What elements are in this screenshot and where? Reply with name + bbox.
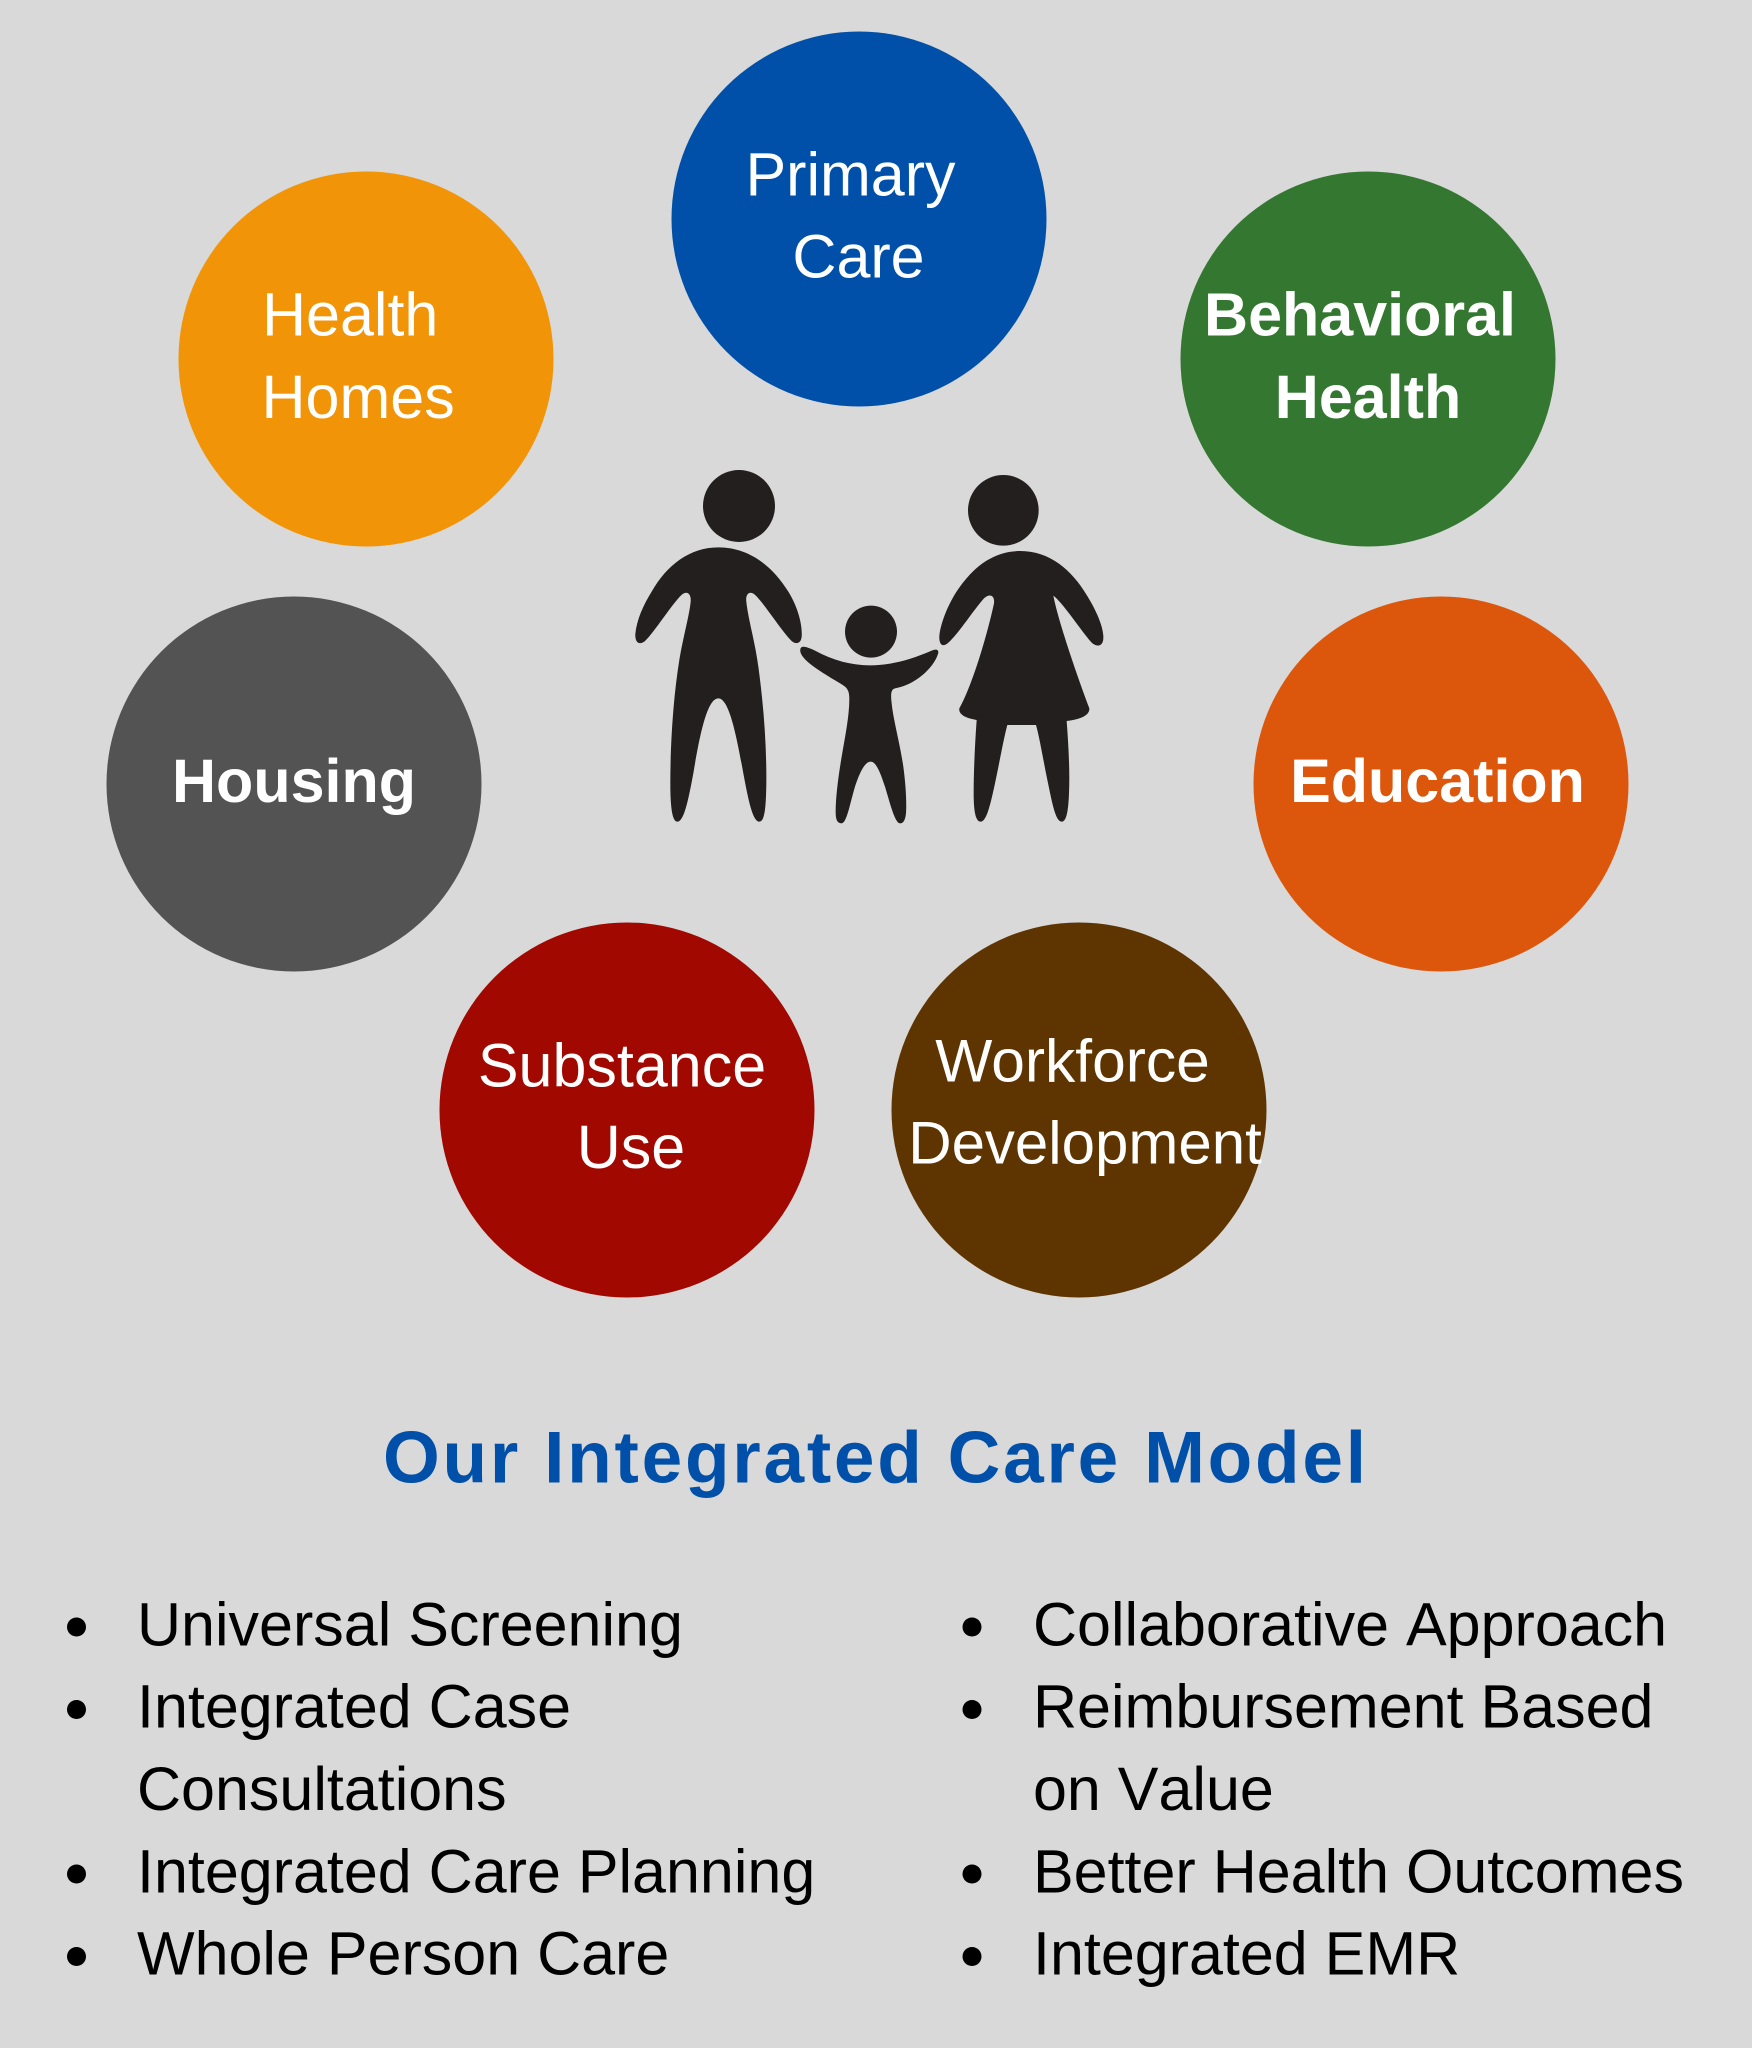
list item: reimbursement based on value: [962, 1672, 1653, 1823]
panel: housing circle: Housing: [172, 747, 416, 815]
list item: universal screening: Universal Screening: [137, 1590, 683, 1658]
panel: health homes circle: [178, 172, 554, 546]
panel: primary care circle: Care: [792, 222, 925, 290]
title: Our Integrated Care Model: [383, 1418, 1366, 1498]
list item: integrated case consultations: Integrated Case: [137, 1672, 571, 1740]
list item: whole person care: Whole Person Care: [137, 1920, 669, 1988]
icon: father: [635, 470, 802, 822]
list: right column: [962, 1590, 1684, 1988]
panel: primary care circle: Primary: [745, 140, 956, 208]
panel: primary care circle: [672, 32, 1046, 406]
panel: behavioral health circle: Health: [1275, 363, 1461, 431]
icon: mother: [939, 475, 1103, 822]
panel: substance use circle: Substance: [478, 1032, 766, 1100]
list item: integrated case consultations: [67, 1672, 571, 1823]
panel: education circle: Education: [1290, 747, 1585, 815]
list item: reimbursement based on value: Reimbursement Based: [1033, 1672, 1653, 1740]
list item: reimbursement based on value: on Value: [1033, 1755, 1274, 1823]
panel: substance use circle: Use: [577, 1113, 685, 1181]
panel: housing circle: [106, 596, 482, 972]
list item: collaborative approach: Collaborative Approach: [1033, 1590, 1667, 1658]
list item: integrated case consultations: Consultations: [137, 1755, 507, 1823]
icon: child: [800, 606, 938, 823]
icon: family silhouette: [635, 470, 1103, 823]
panel: substance use circle: [440, 922, 814, 1298]
list item: integrated emr: Integrated EMR: [1033, 1920, 1460, 1988]
list item: better health outcomes: Better Health Outcomes: [1033, 1838, 1684, 1906]
panel: workforce development circle: Workforce: [935, 1026, 1210, 1094]
list item: integrated care planning: Integrated Care Planning: [137, 1838, 815, 1906]
panel: workforce development circle: [892, 922, 1266, 1298]
panel: behavioral health circle: Behavioral: [1204, 281, 1516, 349]
panel: workforce development circle: Development: [908, 1110, 1262, 1176]
panel: behavioral health circle: [1180, 172, 1556, 546]
list: left column: [67, 1590, 815, 1988]
panel: education circle: [1254, 596, 1628, 972]
panel: health homes circle: Homes: [262, 363, 455, 431]
panel: health homes circle: Health: [262, 281, 438, 349]
